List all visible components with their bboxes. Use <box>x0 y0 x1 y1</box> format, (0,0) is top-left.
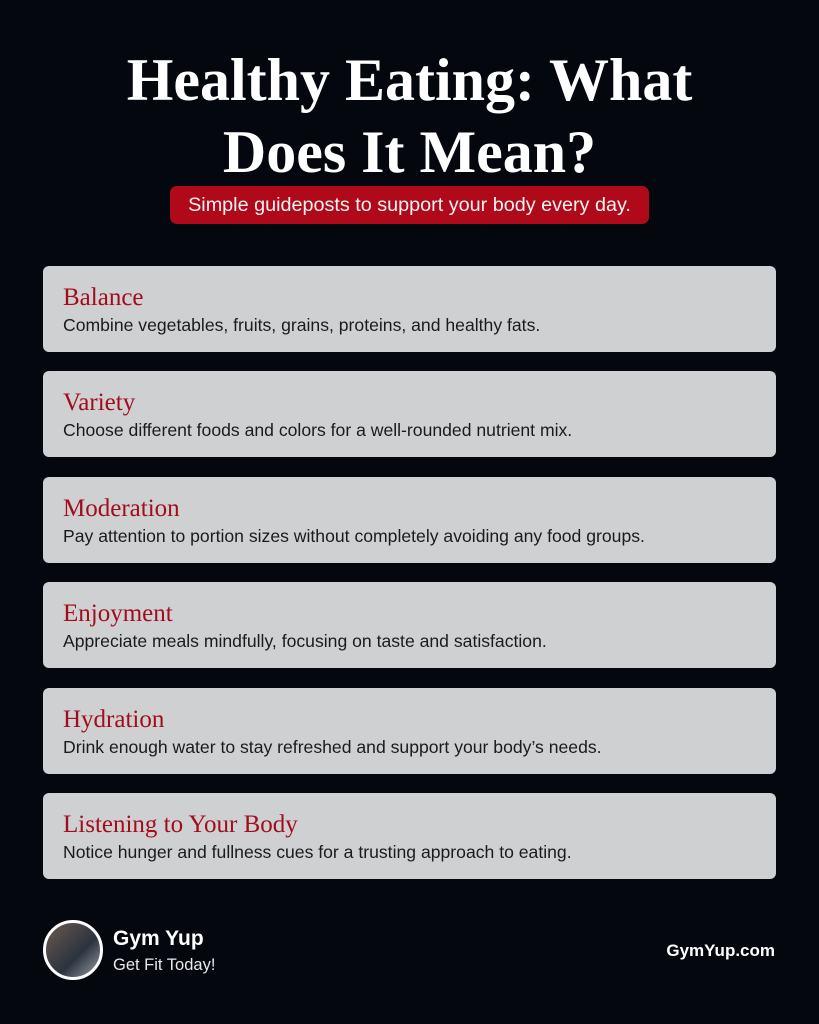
subtitle pill: Simple guideposts to support your body every day. <box>188 194 631 216</box>
card: hydration: Drink enough water to stay refreshed and support your body’s needs. <box>63 737 602 757</box>
brand text: Get Fit Today! <box>113 956 215 974</box>
card: listening <box>43 793 776 879</box>
card: variety: Choose different foods and colors for a well-rounded nutrient mix. <box>63 420 572 440</box>
card: listening: Listening to Your Body <box>63 811 298 838</box>
card: balance <box>43 266 776 352</box>
icon: avatar <box>43 920 103 980</box>
card: balance: Combine vegetables, fruits, grains, proteins, and healthy fats. <box>63 315 540 335</box>
brand text: Gym Yup <box>113 927 204 950</box>
website url: GymYup.com <box>666 941 775 960</box>
card: balance: Balance <box>63 284 144 311</box>
card: enjoyment: Appreciate meals mindfully, focusing on taste and satisfaction. <box>63 631 547 651</box>
title <box>127 47 692 185</box>
brand text <box>113 927 215 974</box>
card: enjoyment: Enjoyment <box>63 600 173 627</box>
subtitle pill <box>170 186 649 224</box>
card: moderation <box>43 477 776 563</box>
card: hydration <box>43 688 776 774</box>
card: moderation: Moderation <box>63 495 180 522</box>
card: enjoyment <box>43 582 776 668</box>
card: variety: Variety <box>63 389 135 416</box>
title: Does It Mean? <box>223 119 596 185</box>
card: listening: Notice hunger and fullness cues for a trusting approach to eating. <box>63 842 572 862</box>
title: Healthy Eating: What <box>127 47 692 113</box>
card: hydration: Hydration <box>63 706 164 733</box>
card: variety <box>43 371 776 457</box>
card: moderation: Pay attention to portion sizes without completely avoiding any food groups. <box>63 526 645 546</box>
